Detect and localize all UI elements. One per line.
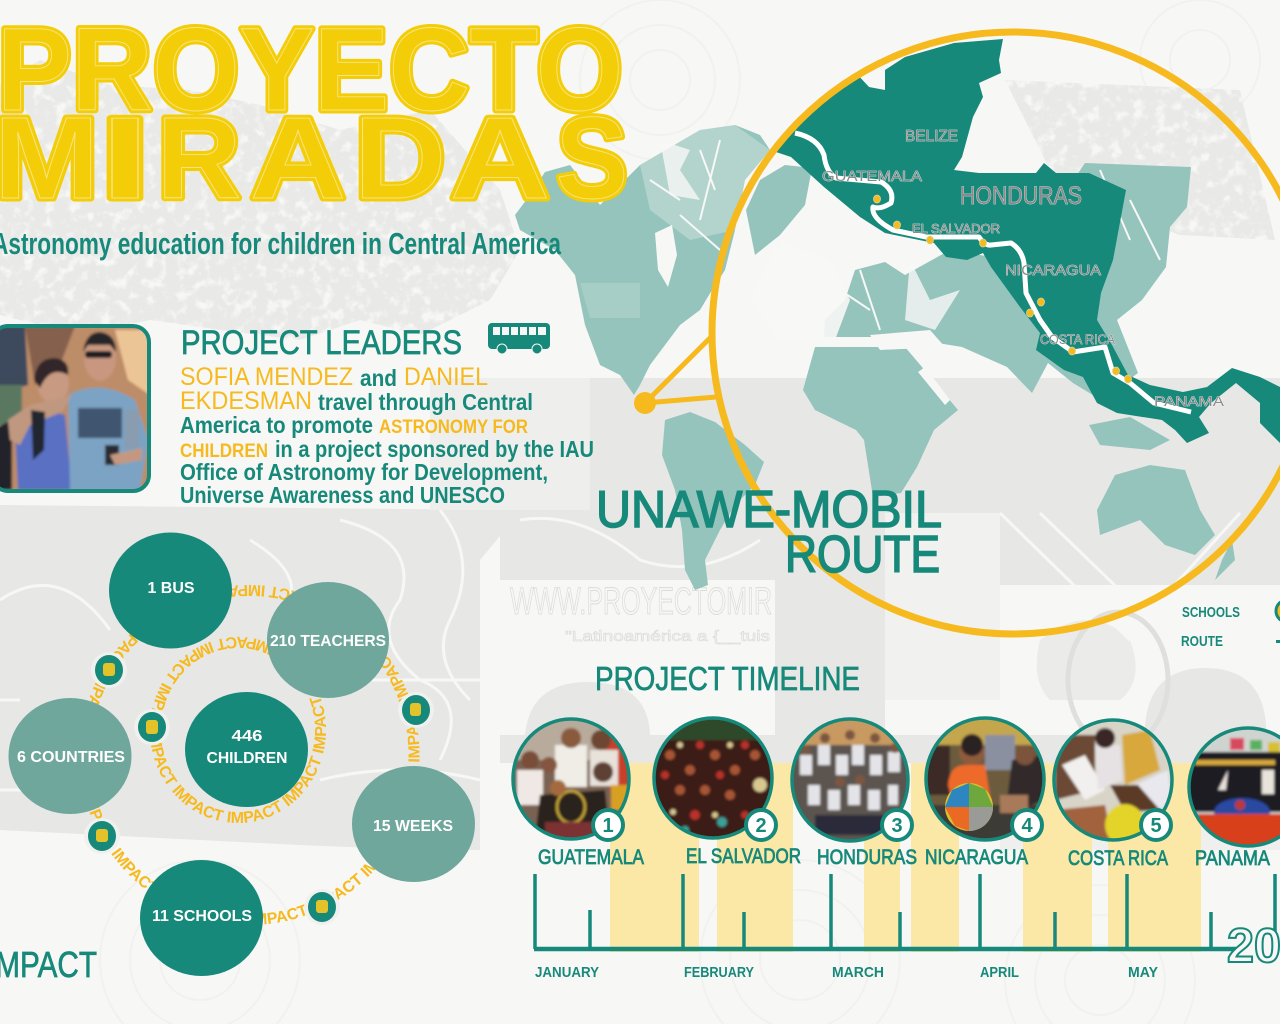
timeline month labels: MAY xyxy=(1128,964,1158,981)
timeline month labels: FEBRUARY xyxy=(684,964,754,981)
impact stat: 446 children xyxy=(185,692,308,807)
timeline month labels: MARCH xyxy=(832,964,884,981)
project leaders text xyxy=(180,363,594,508)
timeline country labels: GUATEMALA xyxy=(538,846,644,869)
map title: UNAWE-MOBIL xyxy=(596,481,942,539)
timeline country labels: NICARAGUA xyxy=(925,846,1028,869)
project leaders text: travel through Central xyxy=(318,389,533,415)
map title: ROUTE xyxy=(785,526,940,584)
project leaders text: SOFIA MENDEZ xyxy=(180,363,353,391)
project leaders text: America to promote xyxy=(180,412,373,438)
central america map zoom xyxy=(770,39,1280,450)
impact ring text xyxy=(90,584,420,924)
project leaders text: CHILDREN xyxy=(180,441,268,462)
photo: Nicaragua xyxy=(922,715,1050,845)
country labels: BELIZE xyxy=(905,128,958,145)
route magnifier ring xyxy=(712,32,1280,634)
photo: Guatemala xyxy=(510,715,635,845)
project leaders text: and xyxy=(360,365,397,391)
title: R xyxy=(157,93,241,223)
timeline country labels: EL SALVADOR xyxy=(686,845,801,868)
background silhouettes: WWW.PROYECTOMIR xyxy=(510,581,772,623)
impact connector badges xyxy=(84,652,434,925)
impact stat: 6 countries xyxy=(8,698,132,814)
timeline country labels: HONDURAS xyxy=(817,846,917,869)
impact stat: 11 schools: 11 SCHOOLS xyxy=(152,908,252,925)
icon: bus xyxy=(488,323,550,354)
photo: El Salvador xyxy=(650,715,778,843)
impact stat: 446 children: 446 xyxy=(232,728,263,745)
number badges xyxy=(593,810,1171,840)
title: I xyxy=(100,93,150,223)
mural lines xyxy=(0,510,1240,790)
timeline country labels xyxy=(538,845,1270,870)
project leaders text: ASTRONOMY FOR xyxy=(379,417,528,438)
photo: Costa Rica xyxy=(1050,715,1178,846)
country labels: COSTA RICA xyxy=(1040,331,1116,347)
title: S xyxy=(556,93,628,223)
route line xyxy=(795,133,1191,412)
title: A xyxy=(250,93,346,223)
number badges: 2 xyxy=(755,815,767,837)
timeline month labels: JANUARY xyxy=(535,964,599,981)
impact stat: 210 teachers: 210 TEACHERS xyxy=(270,633,386,650)
impact stat: 1 bus xyxy=(109,532,232,648)
timeline year: 20 xyxy=(1227,920,1280,973)
impact stat: 11 schools xyxy=(140,860,263,976)
impact stat: 446 children: CHILDREN xyxy=(206,750,288,767)
photo: Panama xyxy=(1188,725,1280,850)
timeline school periods xyxy=(610,763,1201,952)
country labels: EL SALVADOR xyxy=(912,221,1000,236)
route callout lines xyxy=(645,334,716,403)
timeline axis xyxy=(534,874,1275,949)
title: S xyxy=(556,93,628,223)
map title xyxy=(596,481,942,584)
timeline month labels: APRIL xyxy=(980,964,1019,981)
map legend xyxy=(1181,600,1280,650)
country labels: PANAMA xyxy=(1154,393,1225,409)
country shape xyxy=(770,39,1280,450)
project leaders text: Office of Astronomy for Development, xyxy=(180,459,548,485)
project leaders heading: PROJECT LEADERS xyxy=(181,324,462,362)
title: PROYECTO xyxy=(0,4,623,136)
title xyxy=(0,4,628,223)
timeline country labels: COSTA RICA xyxy=(1068,847,1168,870)
country labels: GUATEMALA xyxy=(822,168,922,185)
country labels xyxy=(822,128,1225,409)
title: D xyxy=(354,93,446,223)
timeline country labels: PANAMA xyxy=(1195,847,1270,870)
impact stat: 15 weeks: 15 WEEKS xyxy=(373,818,453,835)
subtitle: Astronomy education for children in Central America xyxy=(0,226,562,261)
title: D xyxy=(354,93,446,223)
background silhouettes: "Latinoamérica a {__tuis xyxy=(565,628,770,645)
title: A xyxy=(450,93,550,223)
title: A xyxy=(450,93,550,223)
timeline month labels xyxy=(535,964,1158,981)
impact stat: 15 weeks xyxy=(352,766,475,882)
leaders photo xyxy=(0,326,152,491)
map legend: SCHOOLS xyxy=(1182,604,1240,621)
country labels: HONDURAS xyxy=(960,182,1082,210)
impact stat: 1 bus: 1 BUS xyxy=(148,580,195,597)
title: A xyxy=(250,93,346,223)
number badges: 5 xyxy=(1150,815,1162,837)
number badges: 3 xyxy=(891,815,903,837)
impact stat: 6 countries: 6 COUNTRIES xyxy=(17,749,125,766)
timeline heading: PROJECT TIMELINE xyxy=(595,660,860,697)
school markers xyxy=(874,195,1132,383)
photo: Honduras xyxy=(788,715,913,845)
project leaders text: EKDESMAN xyxy=(180,387,312,415)
title: R xyxy=(157,93,241,223)
world map xyxy=(515,125,1235,590)
color wheel xyxy=(945,783,993,831)
project leaders text: DANIEL xyxy=(404,363,488,391)
number badges: 4 xyxy=(1021,815,1033,837)
number badges: 1 xyxy=(602,815,614,837)
country labels: NICARAGUA xyxy=(1005,262,1101,279)
title: PROYECTO xyxy=(0,4,623,136)
map legend: ROUTE xyxy=(1181,633,1223,650)
project leaders text: Universe Awareness and UNESCO xyxy=(180,482,505,508)
impact stat: 210 teachers xyxy=(267,582,389,698)
impact ring text: IMPACT IMPACT IMPACT IMPACT IMPACT IMPACT IMPACT IMPACT IMPACT IMPACT IMPACT IMPACT IMPACT IMPACT IMPACT IMPACT IMPACT IMPACT xyxy=(90,584,420,924)
route origin dot xyxy=(634,392,656,414)
title: I xyxy=(100,93,150,223)
project leaders text: in a project sponsored by the IAU xyxy=(275,436,594,462)
